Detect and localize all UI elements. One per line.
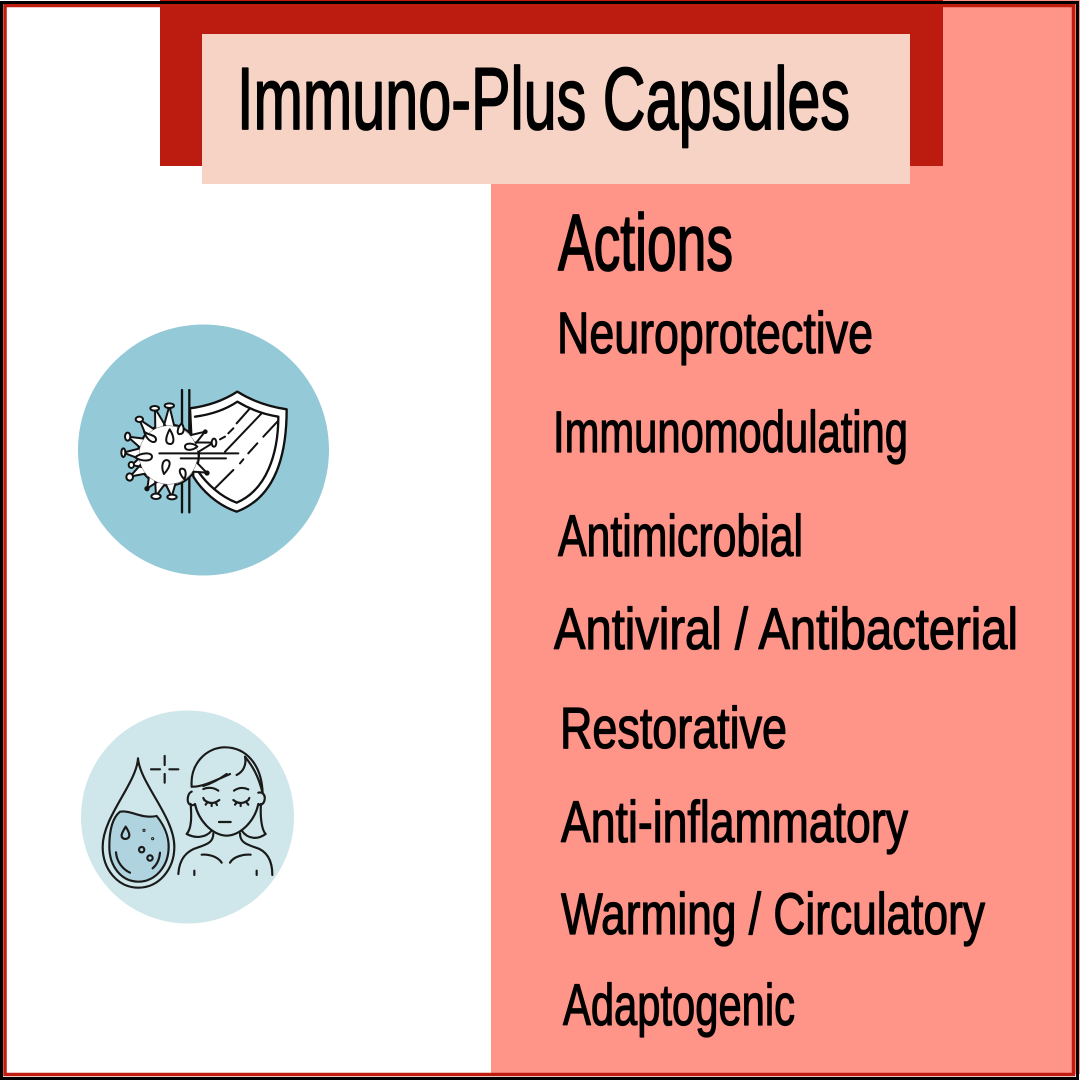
action: Antimicrobial: Antimicrobial [558, 504, 803, 569]
action: Neuroprotective: Neuroprotective [557, 301, 873, 366]
barrier lines [182, 390, 189, 512]
icon: virus and shield [78, 324, 329, 576]
shield [190, 392, 287, 512]
woman [178, 747, 272, 875]
icon background circle [81, 710, 294, 924]
action: Anti-inflammatory: Anti-inflammatory [561, 790, 908, 855]
icon background circle [78, 324, 329, 576]
action: Immunomodulating: Immunomodulating [553, 400, 908, 465]
action: Restorative: Restorative [560, 696, 787, 761]
panel: actions background [491, 0, 1080, 1074]
arrow lines [159, 453, 238, 458]
water drop [103, 758, 174, 888]
virus [121, 403, 216, 499]
action: Adaptogenic: Adaptogenic [563, 973, 795, 1038]
header: title plate [202, 34, 910, 184]
header: red banner [160, 0, 943, 166]
sparkle [151, 756, 178, 783]
icon: water drop and face [81, 710, 294, 924]
heading: Actions: Actions [558, 198, 733, 287]
